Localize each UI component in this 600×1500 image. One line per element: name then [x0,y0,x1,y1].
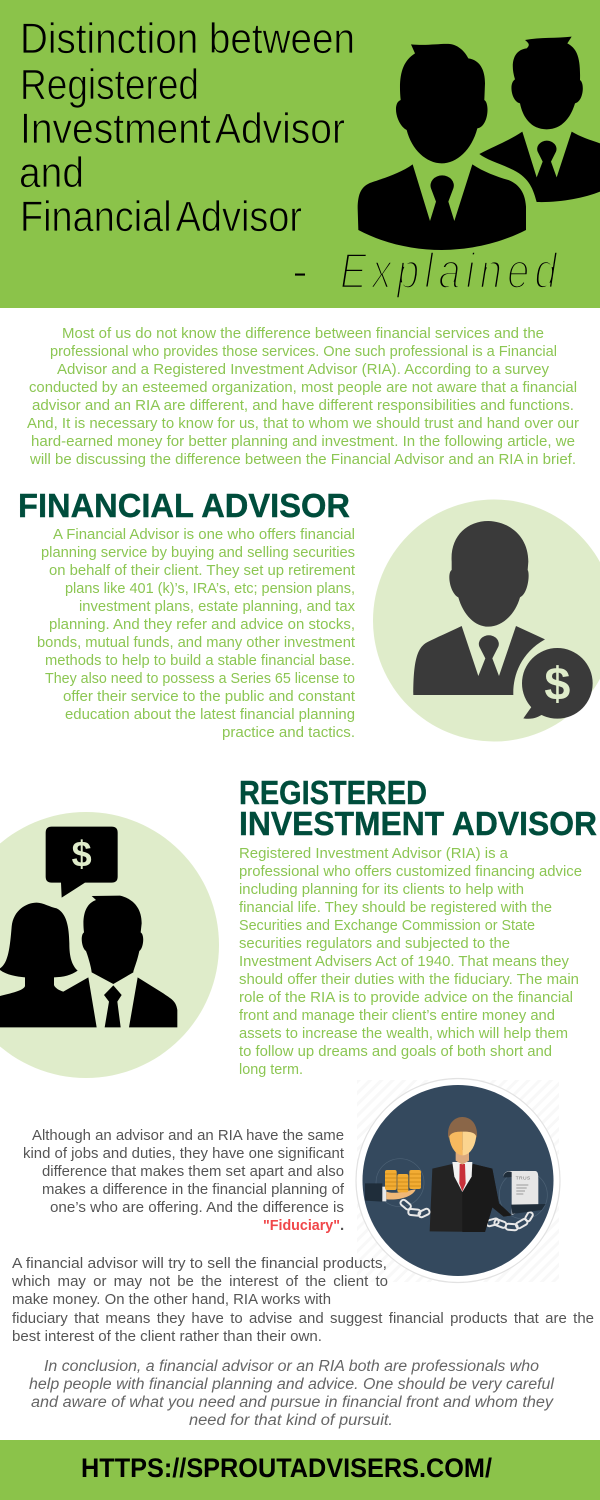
text: comparison paragraph [11,1255,594,1345]
illustration: chained fiduciary advisor: TRUS [516,1176,531,1182]
title: Financial Advisor [20,193,302,241]
intro paragraph: hard-earned money for better planning and investment. In the following article, we [31,433,575,450]
subtitle: Explained: - [292,243,308,299]
text: Although paragraph [23,1127,345,1234]
text: RIA description: role of the RIA is to provide advice on the financial [239,989,573,1006]
text: Financial Advisor description: methods to help to build a stable financial base. [45,652,355,669]
text: conclusion: help people with financial planning and advice. One should be very careful [29,1376,555,1393]
text: Financial Advisor description: They also need to possess a Series 65 license to [45,670,355,687]
heading: Financial Advisor: FINANCIAL ADVISOR [18,487,350,524]
text: Financial Advisor description: practice and tactics. [222,724,355,741]
text: comparison paragraph: best interest of the client rather than their own. [12,1328,322,1345]
intro paragraph: Advisor and a Registered Investment Advisor (RIA). According to a survey [57,361,549,378]
icon: client and advisor with speech bubble: $ [72,834,92,875]
left chain [399,1199,430,1218]
text: Financial Advisor description: bonds, mutual funds, and many other investment [37,634,356,651]
scroll and hand [503,1171,538,1215]
text: Although paragraph: difference that makes them set apart and also [42,1163,344,1180]
face [449,1130,463,1155]
text: conclusion: and aware of what you need and pursue in financial front and whom they [31,1394,554,1411]
text: RIA description: Registered Investment Advisor (RIA) is a [239,845,509,862]
intro paragraph: advisor and an RIA are different, and have different responsibilities and functions. [32,397,574,414]
text: RIA description: Investment Advisers Act of 1940. That means they [239,953,569,970]
text: RIA description: assets to increase the wealth, which will help them [239,1025,568,1042]
text: Financial Advisor description: offer their service to the public and constant [63,688,356,705]
text: RIA description: long term. [239,1061,303,1078]
text: Although paragraph: Although an advisor and an RIA have the same [32,1127,344,1144]
text: Financial Advisor description: planning service by buying and selling securities [41,544,355,561]
header band [0,0,600,308]
text: conclusion [29,1358,555,1429]
intro paragraph: Most of us do not know the difference between financial services and the [62,325,544,342]
icon: advisor with dollar bubble: $ [544,657,570,709]
text: Although paragraph: . [340,1217,344,1234]
text: Financial Advisor description: plans like 401 (k)’s, IRA’s, etc; pension plans, [65,580,355,597]
neck [456,1150,469,1165]
icon: client and advisor with speech bubble [0,812,219,1078]
left sleeve and hand with coins [365,1183,382,1202]
title: Registered [20,61,199,109]
text: comparison paragraph: which may or may not be the interest of the client to [11,1273,388,1290]
text: Although paragraph: kind of jobs and duties, they have one significant [23,1145,345,1162]
text: Financial Advisor description [37,526,356,741]
intro paragraph [27,325,579,468]
title: Investment Advisor [20,105,345,153]
text: Although paragraph: "Fiduciary" [263,1217,340,1234]
text: Financial Advisor description: A Financial Advisor is one who offers financial [53,526,355,543]
heading: Registered Investment Advisor [239,774,597,842]
shirt and tie [452,1162,472,1192]
text: RIA description: Securities and Exchange Commission or State [239,917,535,934]
icon: advisor with dollar bubble [373,500,600,742]
footer URL: HTTPS://SPROUTADVISERS.COM/ [81,1453,492,1483]
title [19,15,355,241]
right chain [486,1211,534,1231]
text: RIA description: securities regulators and subjected to the [239,935,510,952]
heading: Registered Investment Advisor: REGISTERED [239,774,427,811]
text: RIA description: including planning for its clients to help with [239,881,524,898]
icon: two businessmen [358,37,600,250]
title: and [19,149,84,197]
subtitle: Explained: Explained [340,243,558,299]
intro paragraph: conducted by an esteemed organization, most people are not aware that a financial [29,379,577,396]
intro paragraph: professional who provides those services. One such professional is a Financial [50,343,557,360]
text: conclusion: need for that kind of pursuit. [189,1412,393,1429]
text: RIA description: professional who offers customized financing advice [239,863,582,880]
text: Financial Advisor description: planning. And they refer and advice on stocks, [49,616,355,633]
intro paragraph: will be discussing the difference between the Financial Advisor and an RIA in brief. [29,451,576,468]
text: Financial Advisor description: investment plans, estate planning, and tax [79,598,355,615]
text: comparison paragraph: A financial advisor will try to sell the financial products, [12,1255,387,1272]
intro paragraph: And, It is necessary to know for us, that to whom we should trust and hand over our [27,415,579,432]
text: RIA description: should offer their duties with the fiduciary. The main [239,971,579,988]
text: Although paragraph: makes a difference in the financial planning of [42,1181,345,1198]
text: RIA description [239,845,582,1078]
text: comparison paragraph: make money. On the other hand, RIA works with [12,1291,331,1308]
hair [448,1117,477,1138]
text: RIA description: financial life. They should be registered with the [239,899,552,916]
footer band [0,1440,600,1500]
coin stacks [385,1170,421,1192]
text: RIA description: front and manage their client’s entire money and [239,1007,555,1024]
illustration: chained fiduciary advisor [356,1078,560,1282]
suit [430,1164,512,1232]
text: comparison paragraph: fiduciary that means they have to advise and suggest financial products that are the [12,1310,594,1327]
text: conclusion: In conclusion, a financial advisor or an RIA both are professionals who [44,1358,539,1375]
heading: Registered Investment Advisor: INVESTMENT ADVISOR [239,805,597,842]
text: Financial Advisor description: on behalf of their client. They set up retirement [49,562,356,579]
text: RIA description: to follow up dreams and goals of both short and [239,1043,552,1060]
text: Although paragraph: one’s who are offering. And the difference is [50,1199,344,1216]
title: Distinction between [20,15,355,63]
text: Financial Advisor description: education about the latest financial planning [65,706,355,723]
